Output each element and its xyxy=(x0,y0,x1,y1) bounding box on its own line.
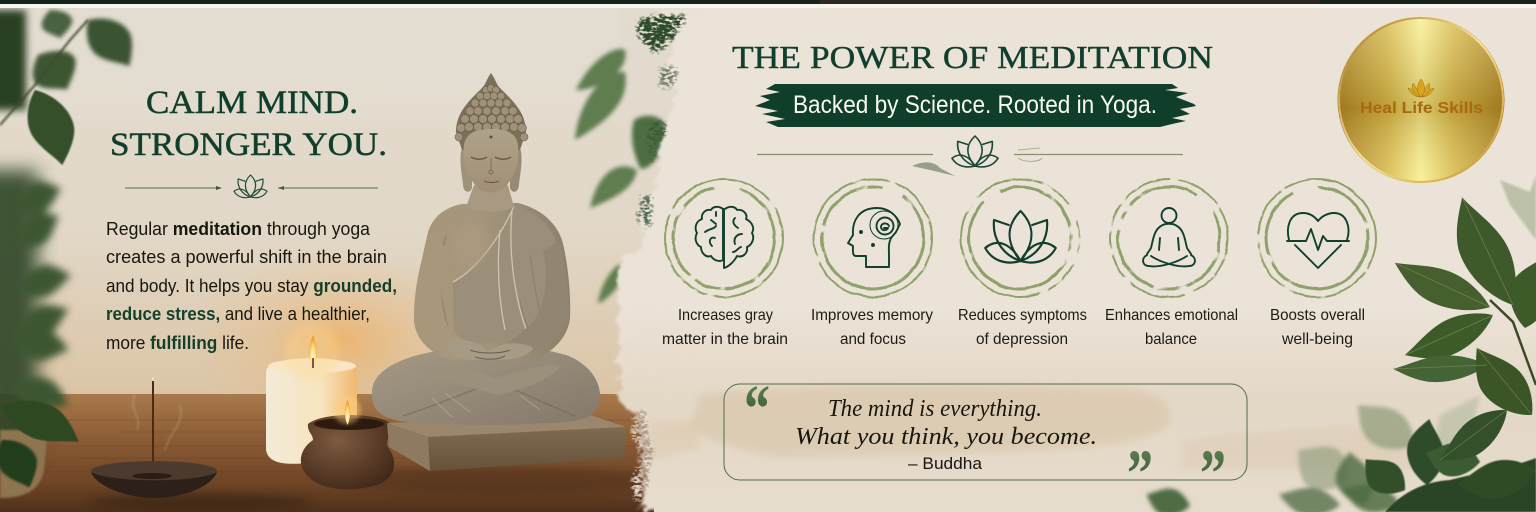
heading: Calm Mind Stronger You xyxy=(110,85,387,163)
blurred plant on the left xyxy=(0,4,147,498)
white pillar candle xyxy=(266,324,357,464)
blurred background leaves near centre xyxy=(575,49,666,304)
text block: intro paragraph xyxy=(106,219,397,353)
banner: brush stroke subtitle xyxy=(755,84,1196,127)
torso and robe xyxy=(414,203,570,360)
banner: brush stroke subtitle: Backed by Science. Rooted in Yoga. xyxy=(793,91,1157,119)
text block: intro paragraph: creates a powerful shift in the brain xyxy=(106,247,387,267)
callout: Buddha quote: – Buddha xyxy=(908,454,983,473)
benefit label: balance xyxy=(1145,331,1197,348)
closing quote marks xyxy=(1127,437,1226,512)
sharp leaves xyxy=(1386,189,1536,475)
arms and hands xyxy=(414,232,478,358)
icon: lotus xyxy=(985,211,1056,263)
icon ring xyxy=(1110,179,1228,297)
ears xyxy=(460,146,472,192)
gold logo badge: Heal Life Skills xyxy=(1360,100,1483,117)
plant pot xyxy=(0,430,48,498)
benefit label: Enhances emotional xyxy=(1105,307,1238,324)
benefit label: well-being xyxy=(1281,331,1353,348)
text block: intro paragraph: more fulfilling life. xyxy=(106,333,249,353)
callout: Buddha quote: The mind is everything. xyxy=(828,396,1042,422)
panel: left photo scene xyxy=(0,0,680,512)
icon: meditating figure xyxy=(1143,208,1195,266)
benefit: well-being xyxy=(1258,179,1376,348)
opening quote mark: “ xyxy=(744,372,770,447)
closing quote marks: ” xyxy=(1127,437,1153,512)
text block: intro paragraph: reduce stress, and live a healthier, xyxy=(106,304,370,324)
stone base block xyxy=(387,415,626,471)
text block: intro paragraph: and body. It helps you stay grounded, xyxy=(106,276,397,296)
wooden table xyxy=(0,394,680,512)
incense holder and stick xyxy=(91,377,217,498)
icon: head with spiral xyxy=(848,208,900,267)
icon ring xyxy=(814,179,932,297)
benefit label: Improves memory xyxy=(811,307,933,324)
benefit label: of depression xyxy=(976,331,1068,348)
icon ring xyxy=(1258,179,1376,297)
hair xyxy=(456,73,526,150)
callout: Buddha quote xyxy=(724,372,1247,512)
icon ring xyxy=(961,179,1079,297)
heading: Calm Mind Stronger You: CALM MIND. xyxy=(146,85,358,121)
heading: Calm Mind Stronger You: STRONGER YOU. xyxy=(110,127,387,163)
benefit: emotional balance xyxy=(1105,179,1238,348)
gold logo badge xyxy=(1338,16,1504,184)
benefit: gray matter xyxy=(662,179,788,348)
speckled paint edge xyxy=(628,14,692,506)
benefit label xyxy=(1270,307,1365,348)
top strip xyxy=(0,0,1536,8)
Buddha statue xyxy=(372,73,600,425)
blurred lower leaves xyxy=(1142,391,1425,512)
divider with lotus: right xyxy=(757,136,1183,176)
benefit label: and focus xyxy=(840,331,906,348)
benefit label xyxy=(662,307,788,348)
icon: brain xyxy=(696,207,753,268)
divider with lotus: left xyxy=(125,175,378,198)
legs xyxy=(372,345,600,425)
benefit label xyxy=(1105,307,1238,348)
heading: The Power of Meditation: THE POWER OF MEDITATION xyxy=(732,39,1213,75)
small clay pot candle xyxy=(301,396,394,489)
plant: right foreground leaves xyxy=(1142,189,1536,512)
dark ground foliage xyxy=(1354,418,1536,512)
neck xyxy=(466,185,514,212)
text block: intro paragraph: Regular meditation through yoga xyxy=(106,219,371,239)
icon ring xyxy=(665,179,783,297)
pale green splash top right xyxy=(1500,175,1536,240)
benefit label: Reduces symptoms xyxy=(958,307,1087,324)
closing quote marks: ” xyxy=(1200,437,1226,512)
callout: Buddha quote: What you think, you become. xyxy=(795,424,1097,450)
benefit label: Boosts overall xyxy=(1270,307,1365,324)
benefit label: Increases gray xyxy=(678,307,773,324)
benefit label xyxy=(811,307,933,348)
face xyxy=(464,129,518,192)
benefit: depression xyxy=(958,179,1087,348)
icon: heart with pulse xyxy=(1287,213,1349,268)
benefit label: matter in the brain xyxy=(662,331,788,348)
logo lotus xyxy=(1408,79,1434,97)
benefit: memory and focus xyxy=(811,179,933,348)
panel: right paper background xyxy=(618,8,1536,512)
benefit label xyxy=(958,307,1087,348)
tan wash behind the quote xyxy=(690,385,1171,458)
